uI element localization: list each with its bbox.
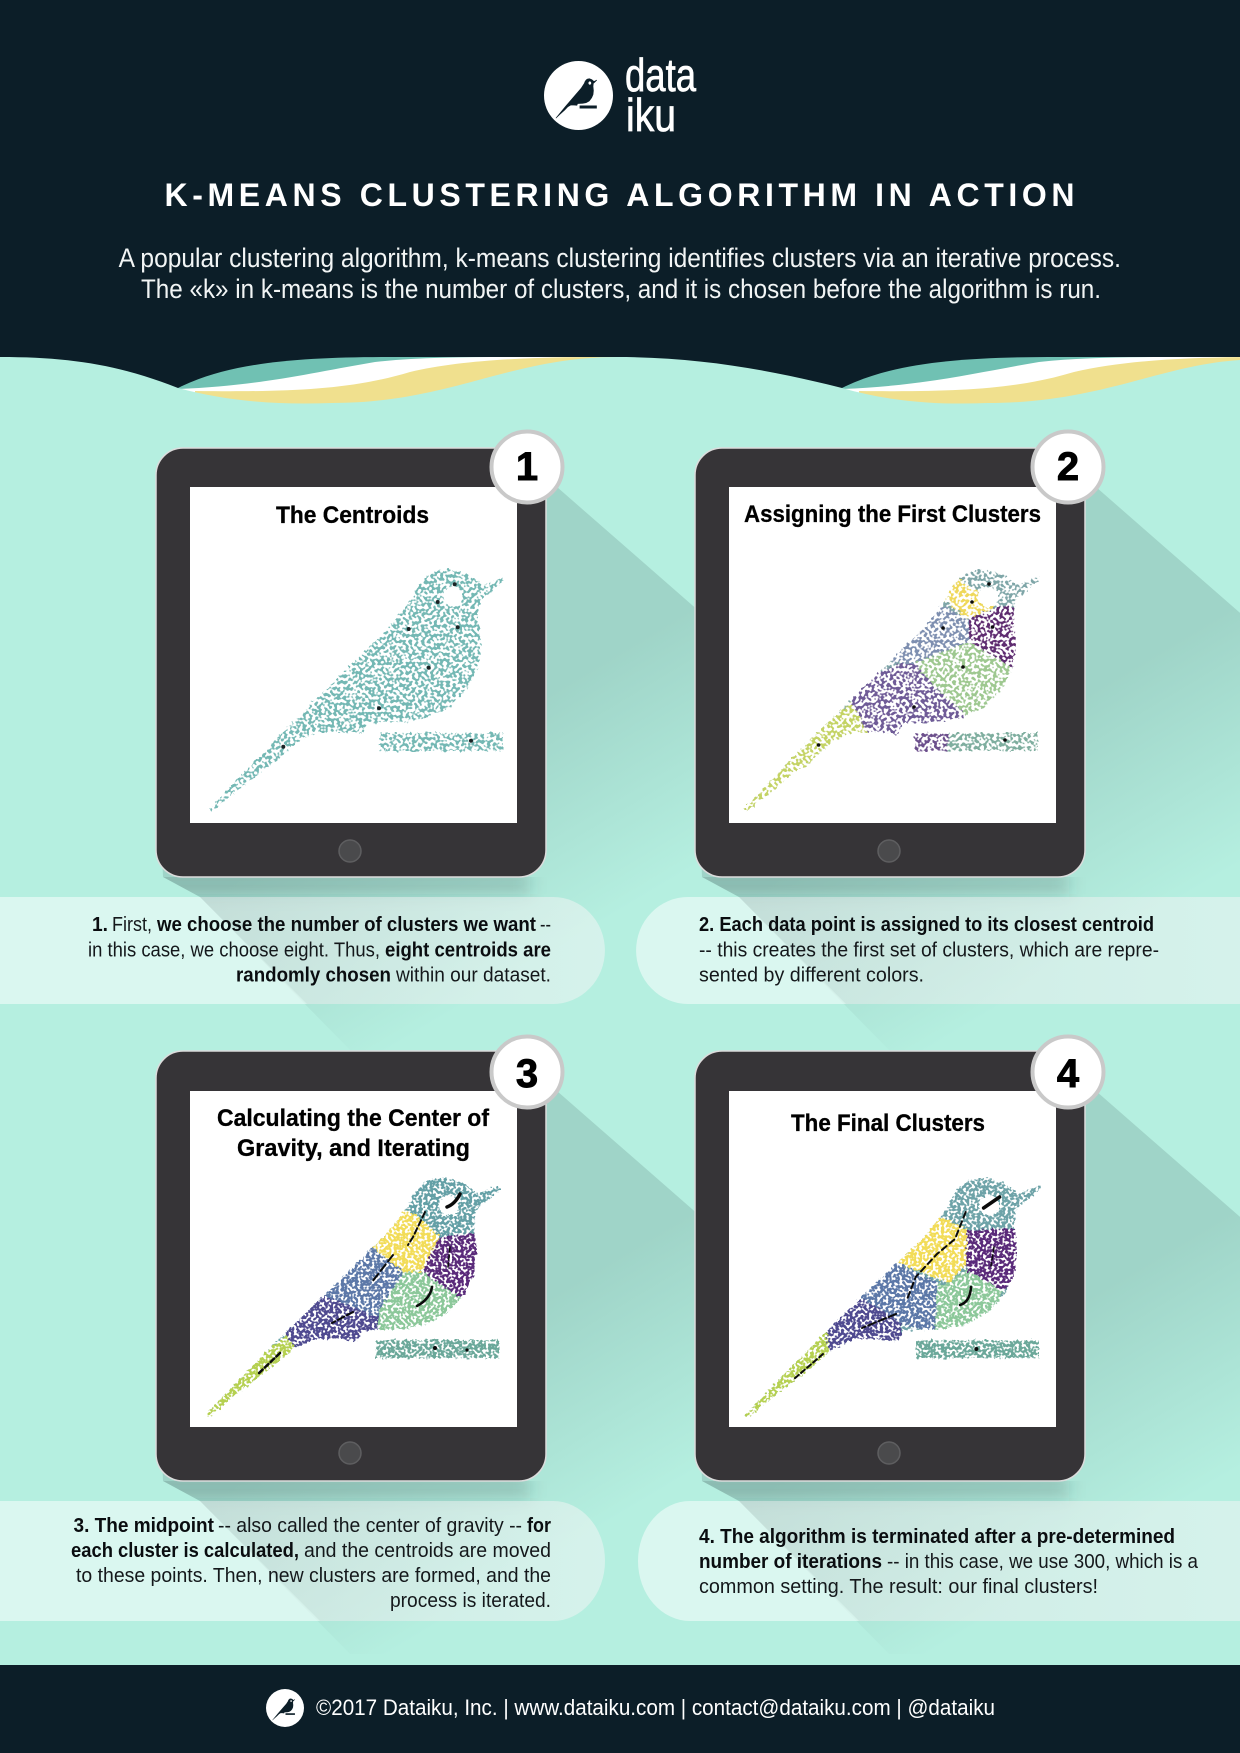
caption text 3: and the centroids are moved bbox=[304, 1540, 551, 1562]
tablet 1 bbox=[156, 448, 546, 877]
logo: iku bbox=[626, 89, 676, 141]
caption text 1 bbox=[88, 914, 551, 986]
caption text 1: 1. bbox=[92, 914, 108, 936]
caption pill 4 bbox=[638, 1501, 1240, 1621]
caption text 4: number of iterations bbox=[699, 1551, 882, 1573]
caption text 4 bbox=[699, 1526, 1199, 1598]
badge 4: 4 bbox=[1057, 1052, 1080, 1096]
tablet 4 bbox=[695, 1051, 1085, 1481]
tablet 2 bbox=[695, 448, 1085, 877]
panel: step 2 bbox=[636, 432, 1240, 1004]
caption text 1: in this case, we choose eight. Thus, bbox=[88, 940, 380, 962]
screen heading 3: Gravity, and Iterating bbox=[237, 1135, 470, 1162]
caption pill 2 bbox=[636, 897, 1240, 1004]
caption text 2 bbox=[699, 914, 1159, 986]
footer logo bbox=[266, 1689, 304, 1727]
caption text 3: process is iterated. bbox=[390, 1590, 551, 1612]
caption text 3 bbox=[71, 1515, 551, 1612]
caption text 4: -- in this case, we use 300, which is a bbox=[887, 1551, 1199, 1573]
intro text: The «k» in k-means is the number of clusters, and it is chosen before the algorithm is run. bbox=[141, 274, 1101, 304]
centroid trails 4 bbox=[794, 1197, 1000, 1379]
scatter plot: final clusters bbox=[744, 1177, 1041, 1417]
caption text 4: common setting. The result: our final clusters! bbox=[699, 1576, 1098, 1598]
caption text 4: 4. The algorithm is terminated after a pre-determined bbox=[699, 1526, 1175, 1548]
centroid trails 3 bbox=[257, 1194, 469, 1375]
caption text 3: for bbox=[527, 1515, 551, 1537]
caption text 1: we choose the number of clusters we want bbox=[156, 914, 536, 936]
caption text 1: eight centroids are bbox=[385, 940, 551, 962]
intro text: A popular clustering algorithm, k-means clustering identifies clusters via an iterative process. bbox=[119, 243, 1121, 273]
caption text 2: sented by different colors. bbox=[699, 964, 924, 986]
caption text 2: -- this creates the first set of clusters, which are repre- bbox=[699, 940, 1159, 962]
long shadows bbox=[150, 470, 1240, 1654]
intro text bbox=[119, 243, 1121, 304]
scatter plot: first clusters bbox=[744, 569, 1040, 812]
caption text 3: each cluster is calculated, bbox=[71, 1540, 299, 1562]
screen heading 1: The Centroids bbox=[276, 502, 429, 529]
logo: data bbox=[625, 49, 696, 101]
wave stripes right bbox=[842, 357, 1240, 410]
badge 4 bbox=[1032, 1036, 1104, 1108]
footer text: ©2017 Dataiku, Inc. | www.dataiku.com | contact@dataiku.com | @dataiku bbox=[316, 1695, 995, 1720]
caption pill 1 bbox=[0, 897, 605, 1004]
caption text 1: -- bbox=[540, 914, 551, 936]
badge 2: 2 bbox=[1057, 445, 1079, 489]
caption text 1: randomly chosen bbox=[236, 964, 391, 986]
logo bbox=[544, 49, 696, 141]
wave stripes left bbox=[178, 357, 617, 410]
screen heading 2: Assigning the First Clusters bbox=[744, 501, 1041, 528]
badge 1: 1 bbox=[516, 445, 538, 489]
footer bbox=[0, 1665, 1240, 1753]
header background bbox=[0, 0, 1240, 420]
caption pill 3 bbox=[0, 1501, 605, 1621]
caption text 3: -- also called the center of gravity -- bbox=[218, 1515, 522, 1537]
caption text 2: 2. Each data point is assigned to its closest centroid bbox=[699, 914, 1154, 936]
badge 2 bbox=[1032, 432, 1104, 502]
tablet 3 bbox=[156, 1051, 546, 1481]
screen heading 3 bbox=[217, 1105, 490, 1162]
caption text 3: 3. The midpoint bbox=[74, 1515, 214, 1537]
panel: step 1 bbox=[0, 432, 605, 1004]
caption text 1: First, bbox=[112, 914, 152, 936]
panel: step 4 bbox=[638, 1036, 1240, 1621]
caption text 3: to these points. Then, new clusters are formed, and the bbox=[76, 1565, 551, 1587]
badge 3: 3 bbox=[516, 1052, 538, 1096]
mint body background with wave top bbox=[0, 357, 1240, 1666]
panel: step 3 bbox=[0, 1036, 605, 1621]
caption text 1: within our dataset. bbox=[395, 964, 551, 986]
scatter plot: centroids on bird bbox=[209, 568, 504, 812]
title: K-MEANS CLUSTERING ALGORITHM IN ACTION bbox=[164, 177, 1074, 213]
badge 1 bbox=[492, 432, 562, 502]
scatter plot: centroids moving bbox=[207, 1177, 501, 1417]
badge 3 bbox=[492, 1036, 562, 1108]
screen heading 4: The Final Clusters bbox=[791, 1110, 985, 1137]
screen heading 3: Calculating the Center of bbox=[217, 1105, 490, 1132]
